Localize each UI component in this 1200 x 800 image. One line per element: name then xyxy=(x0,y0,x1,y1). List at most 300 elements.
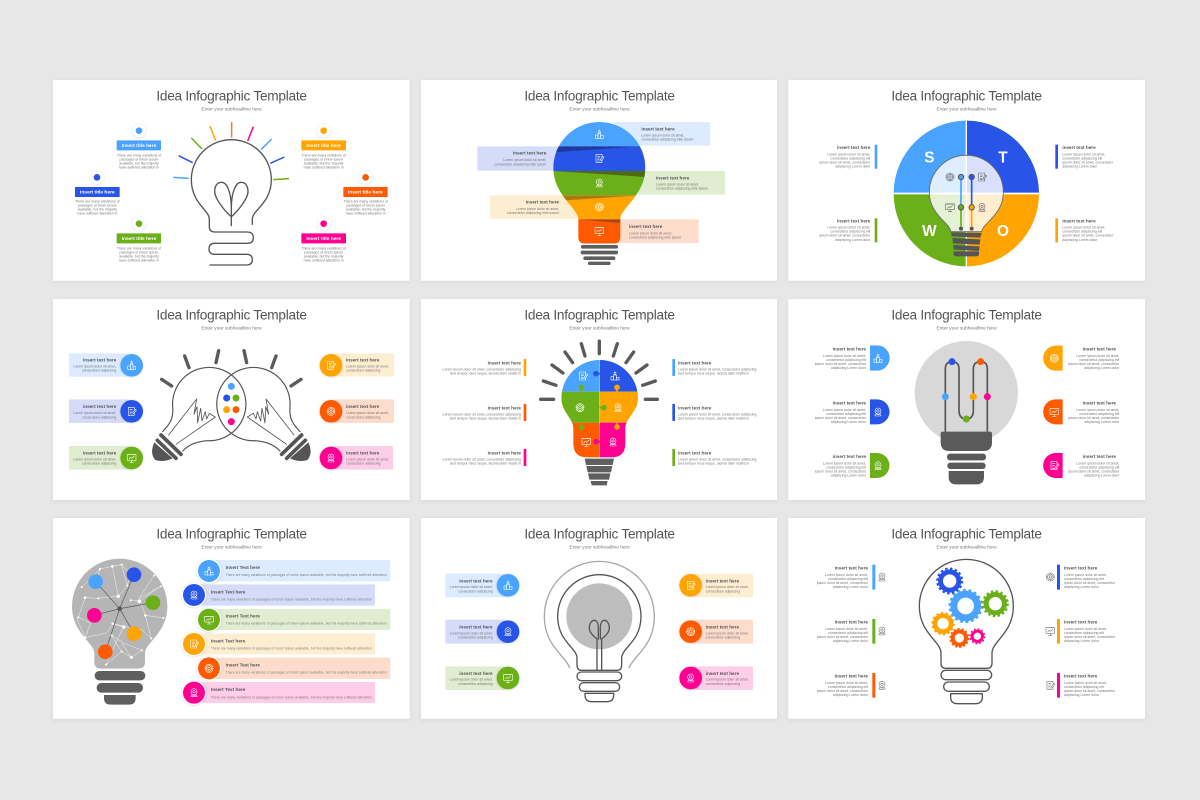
left bulb xyxy=(152,367,246,461)
SWOT quadrant circle xyxy=(894,121,1039,266)
text: right 2: Sed tempor risus neque, lacinia diam mattis in xyxy=(678,416,749,420)
text: left 1: ipsum dolor sit amet, consectetur xyxy=(817,581,869,585)
row 1: There are many variations of passages of lorem ipsum available, but the majority have suffered alteration xyxy=(226,573,387,577)
item: blue: There are many variations of xyxy=(75,200,120,204)
item: left 3: adipiscing Lorem dolor xyxy=(831,473,867,477)
row 4: Insert Text here xyxy=(211,638,246,643)
row 2 xyxy=(182,583,375,607)
gear: blue xyxy=(937,568,962,593)
text: weaknesses xyxy=(819,218,877,242)
item 4: Lorem ipsum dolor sit amet, xyxy=(706,585,749,589)
text: right 3: Lorem ipsum dolor sit amet, consectetur adipiscing xyxy=(678,457,756,461)
title: Idea Infographic Template xyxy=(891,527,1042,542)
item: light blue: available, but the majority xyxy=(119,161,159,165)
text: right 2: adipiscing Lorem dolor xyxy=(1064,639,1100,643)
gear: pink xyxy=(970,629,985,644)
text: right 2 xyxy=(1046,619,1116,644)
item 5: Lorem ipsum dolor sit amet, xyxy=(706,631,749,635)
text: left 1: Sed tempor risus neque, lacinia diam mattis in xyxy=(450,371,521,375)
item: right 1: ipsum dolor sit amet, consectetur xyxy=(1068,362,1120,366)
text: left 2: Sed tempor risus neque, lacinia diam mattis in xyxy=(450,416,521,420)
item 4 xyxy=(320,353,394,377)
title: Idea Infographic Template xyxy=(524,308,675,323)
text: left 1: adipiscing Lorem dolor xyxy=(833,585,869,589)
text: step 1: Lorem ipsum dolor sit amet, xyxy=(641,133,684,137)
item 2: consectetur adipiscing xyxy=(82,415,116,419)
gear: orange xyxy=(950,629,968,647)
item: blue: Insert title here xyxy=(80,190,115,196)
item 6: insert text here xyxy=(706,671,739,676)
item 5 xyxy=(320,399,394,423)
item: right 1: Lorem ipsum dolor sit amet, xyxy=(1076,354,1119,358)
item: left 2: Lorem ipsum dolor sit amet, xyxy=(823,408,866,412)
text: step 3: consectetur adipiscing elite ipsum xyxy=(656,187,708,191)
text: right 3: consectetur adipiscing elit xyxy=(1064,685,1104,689)
text: right 3: adipiscing Lorem dolor xyxy=(1064,693,1100,697)
network hub and spokes xyxy=(94,575,153,652)
row 1 xyxy=(197,559,390,583)
text: weaknesses: consectetur adipiscing elit xyxy=(830,230,870,234)
item: pink: have suffered alteration in xyxy=(304,258,344,262)
item: right 2: ipsum dolor sit amet, consectetur xyxy=(1068,416,1120,420)
text: left 1 xyxy=(443,359,526,376)
text: right 1 xyxy=(672,359,756,376)
panel: two overlapping bulbs xyxy=(53,299,410,500)
item: orange: have suffered alteration in xyxy=(346,212,386,216)
text: left 2: ipsum dolor sit amet, consectetur xyxy=(817,635,869,639)
row 3: There are many variations of passages of lorem ipsum available, but the majority have suffered alteration xyxy=(226,622,387,626)
text: right 1: Lorem ipsum dolor sit amet, xyxy=(1064,573,1107,577)
text: step 1 xyxy=(641,126,694,141)
panel: puzzle bulb xyxy=(421,299,777,500)
item 6 xyxy=(679,666,753,690)
subtitle: Enter your subheadline here xyxy=(201,107,262,113)
text: left 1: Lorem ipsum dolor sit amet, xyxy=(825,573,868,577)
item 2: insert text here xyxy=(83,404,117,409)
item: left 3: Lorem ipsum dolor sit amet, xyxy=(823,461,866,465)
right bulb xyxy=(217,367,311,461)
row 4 xyxy=(182,632,375,656)
text: left 3: consectetur adipiscing elit xyxy=(828,685,868,689)
inner glass bulb xyxy=(929,155,1003,232)
text: left 2: Lorem ipsum dolor sit amet, consectetur adipiscing xyxy=(443,412,521,416)
text: opportunities: ipsum dolor sit amet, consectetur xyxy=(1062,234,1114,238)
icons in bulb xyxy=(576,371,621,446)
item 3: consectetur adipiscing xyxy=(458,682,493,686)
rays xyxy=(162,351,301,386)
item 1: consectetur adipiscing xyxy=(82,369,116,373)
text: right 3: ipsum dolor sit amet, consectetur xyxy=(1064,689,1116,693)
title: Idea Infographic Template xyxy=(891,308,1042,323)
panel: filament bulb xyxy=(788,299,1145,500)
striped bulb xyxy=(551,122,648,244)
text: step 4 xyxy=(507,200,559,215)
network dots xyxy=(77,564,164,666)
item: left 3 xyxy=(815,453,889,478)
text: right 1: adipiscing Lorem dolor xyxy=(1064,585,1100,589)
text: right 2: Lorem ipsum dolor sit amet, consectetur adipiscing xyxy=(678,412,756,416)
item 4: consectetur adipiscing xyxy=(346,369,381,373)
item 5: insert text here xyxy=(706,624,739,629)
item 5 xyxy=(679,620,753,644)
text: left 2 xyxy=(443,404,526,421)
item: green: available, but the majority xyxy=(119,254,159,258)
text: right 2: consectetur adipiscing elit xyxy=(1064,631,1104,635)
item 3: insert text here xyxy=(83,450,117,455)
text: step 2: insert text here xyxy=(513,151,547,156)
item: yellow: available, but the majority xyxy=(304,161,344,165)
item: blue xyxy=(75,171,120,216)
text: right 3: Lorem ipsum dolor sit amet, xyxy=(1064,681,1107,685)
item: pink: passages of lorem Ipsum xyxy=(304,250,343,254)
puzzle knobs xyxy=(578,371,620,444)
item: right 3: insert text here xyxy=(1083,454,1116,459)
text: left 2: insert text here xyxy=(488,405,521,410)
item: green: have suffered alteration in xyxy=(119,258,159,262)
item 6: consectetur adipiscing xyxy=(706,682,740,686)
text: left 1: consectetur adipiscing elit xyxy=(828,577,868,581)
outline bulb xyxy=(919,559,1013,704)
text: right 3 xyxy=(672,449,756,466)
item: pink: Insert title here xyxy=(306,236,341,242)
item: yellow: have suffered alteration in xyxy=(304,166,344,170)
item 5: insert text here xyxy=(346,404,380,409)
gear: light blue xyxy=(950,590,982,622)
item: right 1: insert text here xyxy=(1083,347,1116,352)
icons in bulb xyxy=(946,173,987,212)
item 6 xyxy=(320,446,393,470)
text: strengths: insert text here xyxy=(837,145,871,150)
title: Idea Infographic Template xyxy=(524,89,675,104)
filament dots xyxy=(942,358,991,422)
text: right 1: Sed tempor risus neque, lacinia diam mattis in xyxy=(678,371,749,375)
item: light blue: passages of lorem Ipsum xyxy=(120,157,159,161)
item 3: Lorem ipsum dolor sit amet, xyxy=(450,678,493,682)
text: left 1: Lorem ipsum dolor sit amet, consectetur adipiscing xyxy=(443,367,521,371)
item: right 1: adipiscing Lorem dolor xyxy=(1084,366,1120,370)
text: step 3: Lorem ipsum dolor sit amet, xyxy=(656,183,699,187)
text: right 2: Lorem ipsum dolor sit amet, xyxy=(1064,627,1107,631)
item: blue: passages of lorem Ipsum xyxy=(78,204,117,208)
item: blue: available, but the majority xyxy=(78,208,117,212)
item: left 1: ipsum dolor sit amet, consectetur xyxy=(815,362,867,366)
item 1: insert text here xyxy=(459,578,493,583)
text: right 2: ipsum dolor sit amet, consectetur xyxy=(1064,635,1116,639)
SWOT letters: T xyxy=(998,150,1008,167)
text: threats: consectetur adipiscing elit xyxy=(1062,156,1102,160)
grey bulb xyxy=(72,559,167,669)
item: pink: available, but the majority xyxy=(304,254,344,258)
bulb base xyxy=(95,671,145,705)
text: weaknesses: Lorem ipsum dolor sit amet, xyxy=(827,226,870,230)
item: green xyxy=(117,217,161,262)
text: opportunities: consectetur adipiscing elit xyxy=(1062,230,1102,234)
text: strengths: consectetur adipiscing elit xyxy=(830,156,870,160)
row 1: Insert Text here xyxy=(226,565,260,570)
item: left 1: consectetur adipiscing elit xyxy=(826,358,866,362)
text: left 3: insert text here xyxy=(488,450,521,455)
item: light blue xyxy=(117,124,161,170)
bulb base xyxy=(581,245,618,265)
text: left 3: Lorem ipsum dolor sit amet, xyxy=(825,681,868,685)
subtitle: Enter your subheadline here xyxy=(936,545,997,551)
item: left 1 xyxy=(815,345,890,371)
network lines xyxy=(77,565,163,665)
overlap dots xyxy=(223,383,239,425)
item: orange: Insert title here xyxy=(348,190,383,196)
item 6: Lorem ipsum dolor sit amet, xyxy=(346,457,389,461)
text: step 3: insert text here xyxy=(656,175,690,180)
text: step 2 xyxy=(494,151,547,166)
gear: yellow xyxy=(932,613,954,634)
item: right 3: Lorem ipsum dolor sit amet, xyxy=(1076,461,1119,465)
row 6: Insert Text here xyxy=(211,687,246,692)
text: left 2: consectetur adipiscing elit xyxy=(828,631,868,635)
row 6: There are many variations of passages of lorem ipsum available, but the majority have suffered alteration xyxy=(211,695,372,699)
callout ribbons xyxy=(477,122,725,243)
panel: gears bulb xyxy=(788,518,1145,719)
text: threats: ipsum dolor sit amet, consectetur xyxy=(1062,160,1114,164)
item 4 xyxy=(679,574,753,597)
item: yellow: There are many variations of xyxy=(301,153,346,157)
item: orange xyxy=(343,171,388,216)
text: left 3: adipiscing Lorem dolor xyxy=(833,693,869,697)
subtitle: Enter your subheadline here xyxy=(201,545,262,551)
row 2: Insert Text here xyxy=(211,589,246,594)
item: left 3: consectetur adipiscing elit xyxy=(826,465,866,469)
row 3 xyxy=(197,607,390,632)
item: left 3: ipsum dolor sit amet, consectetur xyxy=(815,469,867,473)
text: weaknesses: insert text here xyxy=(837,218,871,223)
item: green: There are many variations of xyxy=(117,246,161,250)
row 4: There are many variations of passages of lorem ipsum available, but the majority have suffered alteration xyxy=(211,646,372,650)
puzzle bulb xyxy=(560,358,640,459)
item: right 3 xyxy=(1043,453,1120,478)
text: step 5: consectetur adipiscing elite ipsum xyxy=(629,235,681,239)
text: left 2: Lorem ipsum dolor sit amet, xyxy=(825,627,868,631)
rays xyxy=(541,341,657,399)
text: left 1 xyxy=(817,565,885,590)
item: pink xyxy=(301,217,346,262)
text: left 2 xyxy=(817,619,885,644)
text: right 1: Lorem ipsum dolor sit amet, consectetur adipiscing xyxy=(678,367,756,371)
subtitle: Enter your subheadline here xyxy=(936,326,997,332)
row 5 xyxy=(197,656,390,681)
subtitle: Enter your subheadline here xyxy=(936,107,997,113)
SWOT letters: O xyxy=(997,223,1009,240)
text: threats: adipiscing Lorem dolor xyxy=(1062,165,1098,169)
item: yellow xyxy=(301,124,346,170)
subtitle: Enter your subheadline here xyxy=(569,326,630,332)
item 4: consectetur adipiscing xyxy=(706,589,740,593)
item: yellow: Insert title here xyxy=(306,143,341,149)
text: right 3: Insert text here xyxy=(1064,674,1098,679)
text: step 5 xyxy=(629,224,681,239)
item 2 xyxy=(445,620,519,644)
title: Idea Infographic Template xyxy=(156,89,307,104)
panel: network bulb xyxy=(53,518,410,719)
text: step 2: consectetur adipiscing elite ipsum xyxy=(494,162,546,166)
item 4: Lorem ipsum dolor sit amet, xyxy=(346,364,389,368)
icons in bulb xyxy=(595,130,604,235)
text: right 1: insert text here xyxy=(678,360,712,365)
text: left 3: Sed tempor risus neque, lacinia diam mattis in xyxy=(450,461,521,465)
filament xyxy=(945,362,987,432)
outer halo xyxy=(544,561,654,668)
item 4: insert text here xyxy=(346,358,380,363)
text: right 2: insert text here xyxy=(678,405,712,410)
item: right 2: Lorem ipsum dolor sit amet, xyxy=(1076,408,1119,412)
panel: line bulb with rays xyxy=(53,80,410,281)
text: right 3 xyxy=(1047,673,1116,698)
item: blue: have suffered alteration in xyxy=(77,212,117,216)
item 3 xyxy=(69,446,143,470)
item: right 2: adipiscing Lorem dolor xyxy=(1084,420,1120,424)
item: light blue: There are many variations of xyxy=(117,153,161,157)
item: left 1: Lorem ipsum dolor sit amet, xyxy=(823,354,866,358)
item 2: Lorem ipsum dolor sit amet, xyxy=(450,631,493,635)
SWOT letters: W xyxy=(922,223,937,240)
outline bulb xyxy=(558,575,641,702)
item: right 2 xyxy=(1043,399,1120,424)
item: right 2: insert text here xyxy=(1083,400,1116,405)
text: strengths: ipsum dolor sit amet, consectetur xyxy=(819,160,871,164)
item 6: consectetur adipiscing xyxy=(346,462,381,466)
item 1 xyxy=(69,353,143,377)
gear: green xyxy=(983,591,1008,616)
rays xyxy=(173,122,289,180)
subtitle: Enter your subheadline here xyxy=(569,545,630,551)
item 1: consectetur adipiscing xyxy=(458,589,493,593)
bulb base xyxy=(585,459,614,485)
item: right 1: consectetur adipiscing elit xyxy=(1079,358,1119,362)
item 6: Lorem ipsum dolor sit amet, xyxy=(706,678,749,682)
text: weaknesses: adipiscing Lorem dolor xyxy=(835,238,871,242)
text: step 2: Lorem ipsum dolor sit amet, xyxy=(503,158,546,162)
text: step 1: insert text here xyxy=(641,126,675,131)
text: step 4: insert text here xyxy=(526,200,559,205)
item 1 xyxy=(445,574,519,597)
item 2: insert text here xyxy=(459,624,493,629)
panel: halo outline bulb xyxy=(421,518,777,719)
text: right 1: Insert text here xyxy=(1064,566,1098,571)
text: threats xyxy=(1055,145,1114,169)
item 1: Lorem ipsum dolor sit amet, xyxy=(73,364,116,368)
panel: SWOT bulb xyxy=(788,80,1145,281)
item: yellow: passages of lorem Ipsum xyxy=(304,157,343,161)
item: green: passages of lorem Ipsum xyxy=(120,250,159,254)
text: threats: Lorem ipsum dolor sit amet, xyxy=(1062,152,1105,156)
item 6: insert text here xyxy=(346,450,380,455)
item: left 2: insert text here xyxy=(833,400,866,405)
subtitle: Enter your subheadline here xyxy=(201,326,262,332)
grey bulb glass xyxy=(915,341,1018,444)
bulb base xyxy=(941,432,992,484)
item 2: Lorem ipsum dolor sit amet, xyxy=(73,411,116,415)
item: left 2: adipiscing Lorem dolor xyxy=(831,420,867,424)
item: left 1: insert text here xyxy=(833,347,866,352)
item 2: consectetur adipiscing xyxy=(458,636,493,640)
icon: outline bulb xyxy=(191,140,271,265)
text: left 3 xyxy=(817,673,885,698)
SWOT letters: S xyxy=(924,150,934,167)
text: right 2: Insert text here xyxy=(1064,620,1098,625)
text: opportunities: insert text here xyxy=(1062,218,1096,223)
text: step 5: Lorem ipsum dolor sit amet, xyxy=(629,231,672,235)
text: right 2 xyxy=(672,404,756,421)
item 3: consectetur adipiscing xyxy=(82,462,116,466)
panel: striped colour bulb xyxy=(421,80,777,281)
item 5: Lorem ipsum dolor sit amet, xyxy=(346,411,389,415)
item: right 1 xyxy=(1043,346,1120,371)
text: opportunities: adipiscing Lorem dolor xyxy=(1062,238,1098,242)
text: weaknesses: ipsum dolor sit amet, consectetur xyxy=(819,234,871,238)
item 3: insert text here xyxy=(459,671,493,676)
text: opportunities xyxy=(1055,218,1114,242)
text: step 4: consectetur adipiscing elite ipsum xyxy=(507,211,559,215)
text: threats: insert text here xyxy=(1062,145,1096,150)
item: right 2: consectetur adipiscing elit xyxy=(1079,412,1119,416)
network nodes xyxy=(87,567,160,659)
row 2: There are many variations of passages of lorem ipsum available, but the majority have suffered alteration xyxy=(211,597,372,601)
item: green: Insert title here xyxy=(122,236,157,242)
title: Idea Infographic Template xyxy=(891,89,1042,104)
text: step 4: Lorem ipsum dolor sit amet, xyxy=(516,207,559,211)
SWOT letters xyxy=(922,150,1009,240)
item: light blue: have suffered alteration in xyxy=(119,166,159,170)
item: right 3: adipiscing Lorem dolor xyxy=(1084,473,1120,477)
text: strengths: adipiscing Lorem dolor xyxy=(835,165,871,169)
item: right 3: ipsum dolor sit amet, consectetur xyxy=(1068,469,1120,473)
text: right 3: insert text here xyxy=(678,450,712,455)
text: strengths xyxy=(819,145,877,169)
filament connectors xyxy=(958,174,974,231)
text: left 3: ipsum dolor sit amet, consectetur xyxy=(817,689,869,693)
item 4: insert text here xyxy=(706,578,739,583)
item: left 3: insert text here xyxy=(833,454,866,459)
title: Idea Infographic Template xyxy=(524,527,675,542)
title: Idea Infographic Template xyxy=(156,527,307,542)
item 3 xyxy=(445,666,519,690)
text: step 5: insert text here xyxy=(629,224,663,229)
text: left 2: Insert text here xyxy=(835,620,868,625)
item: pink: There are many variations of xyxy=(301,246,346,250)
text: left 1: Insert text here xyxy=(835,566,868,571)
text: strengths: Lorem ipsum dolor sit amet, xyxy=(827,152,870,156)
bulb screw base xyxy=(951,232,982,256)
item 1: insert text here xyxy=(83,358,117,363)
item: orange: There are many variations of xyxy=(343,200,388,204)
item 5: consectetur adipiscing xyxy=(346,415,381,419)
grey circle xyxy=(566,583,632,649)
row 6 xyxy=(182,680,375,705)
text: opportunities: Lorem ipsum dolor sit amet, xyxy=(1062,226,1105,230)
item 1: Lorem ipsum dolor sit amet, xyxy=(450,585,493,589)
item: right 3: consectetur adipiscing elit xyxy=(1079,465,1119,469)
item: light blue: Insert title here xyxy=(122,143,157,149)
row 3: Insert Text here xyxy=(226,614,260,619)
text: left 3: Insert text here xyxy=(835,674,868,679)
text: right 1: consectetur adipiscing elit xyxy=(1064,577,1104,581)
text: right 3: Sed tempor risus neque, lacinia diam mattis in xyxy=(678,461,749,465)
text: left 3: Lorem ipsum dolor sit amet, consectetur adipiscing xyxy=(443,457,521,461)
item: orange: available, but the majority xyxy=(346,208,386,212)
title: Idea Infographic Template xyxy=(156,308,307,323)
row 5: There are many variations of passages of lorem ipsum available, but the majority have suffered alteration xyxy=(226,671,387,675)
item: left 2 xyxy=(815,399,889,424)
item: orange: passages of lorem Ipsum xyxy=(346,204,385,208)
text: left 3 xyxy=(443,449,526,466)
